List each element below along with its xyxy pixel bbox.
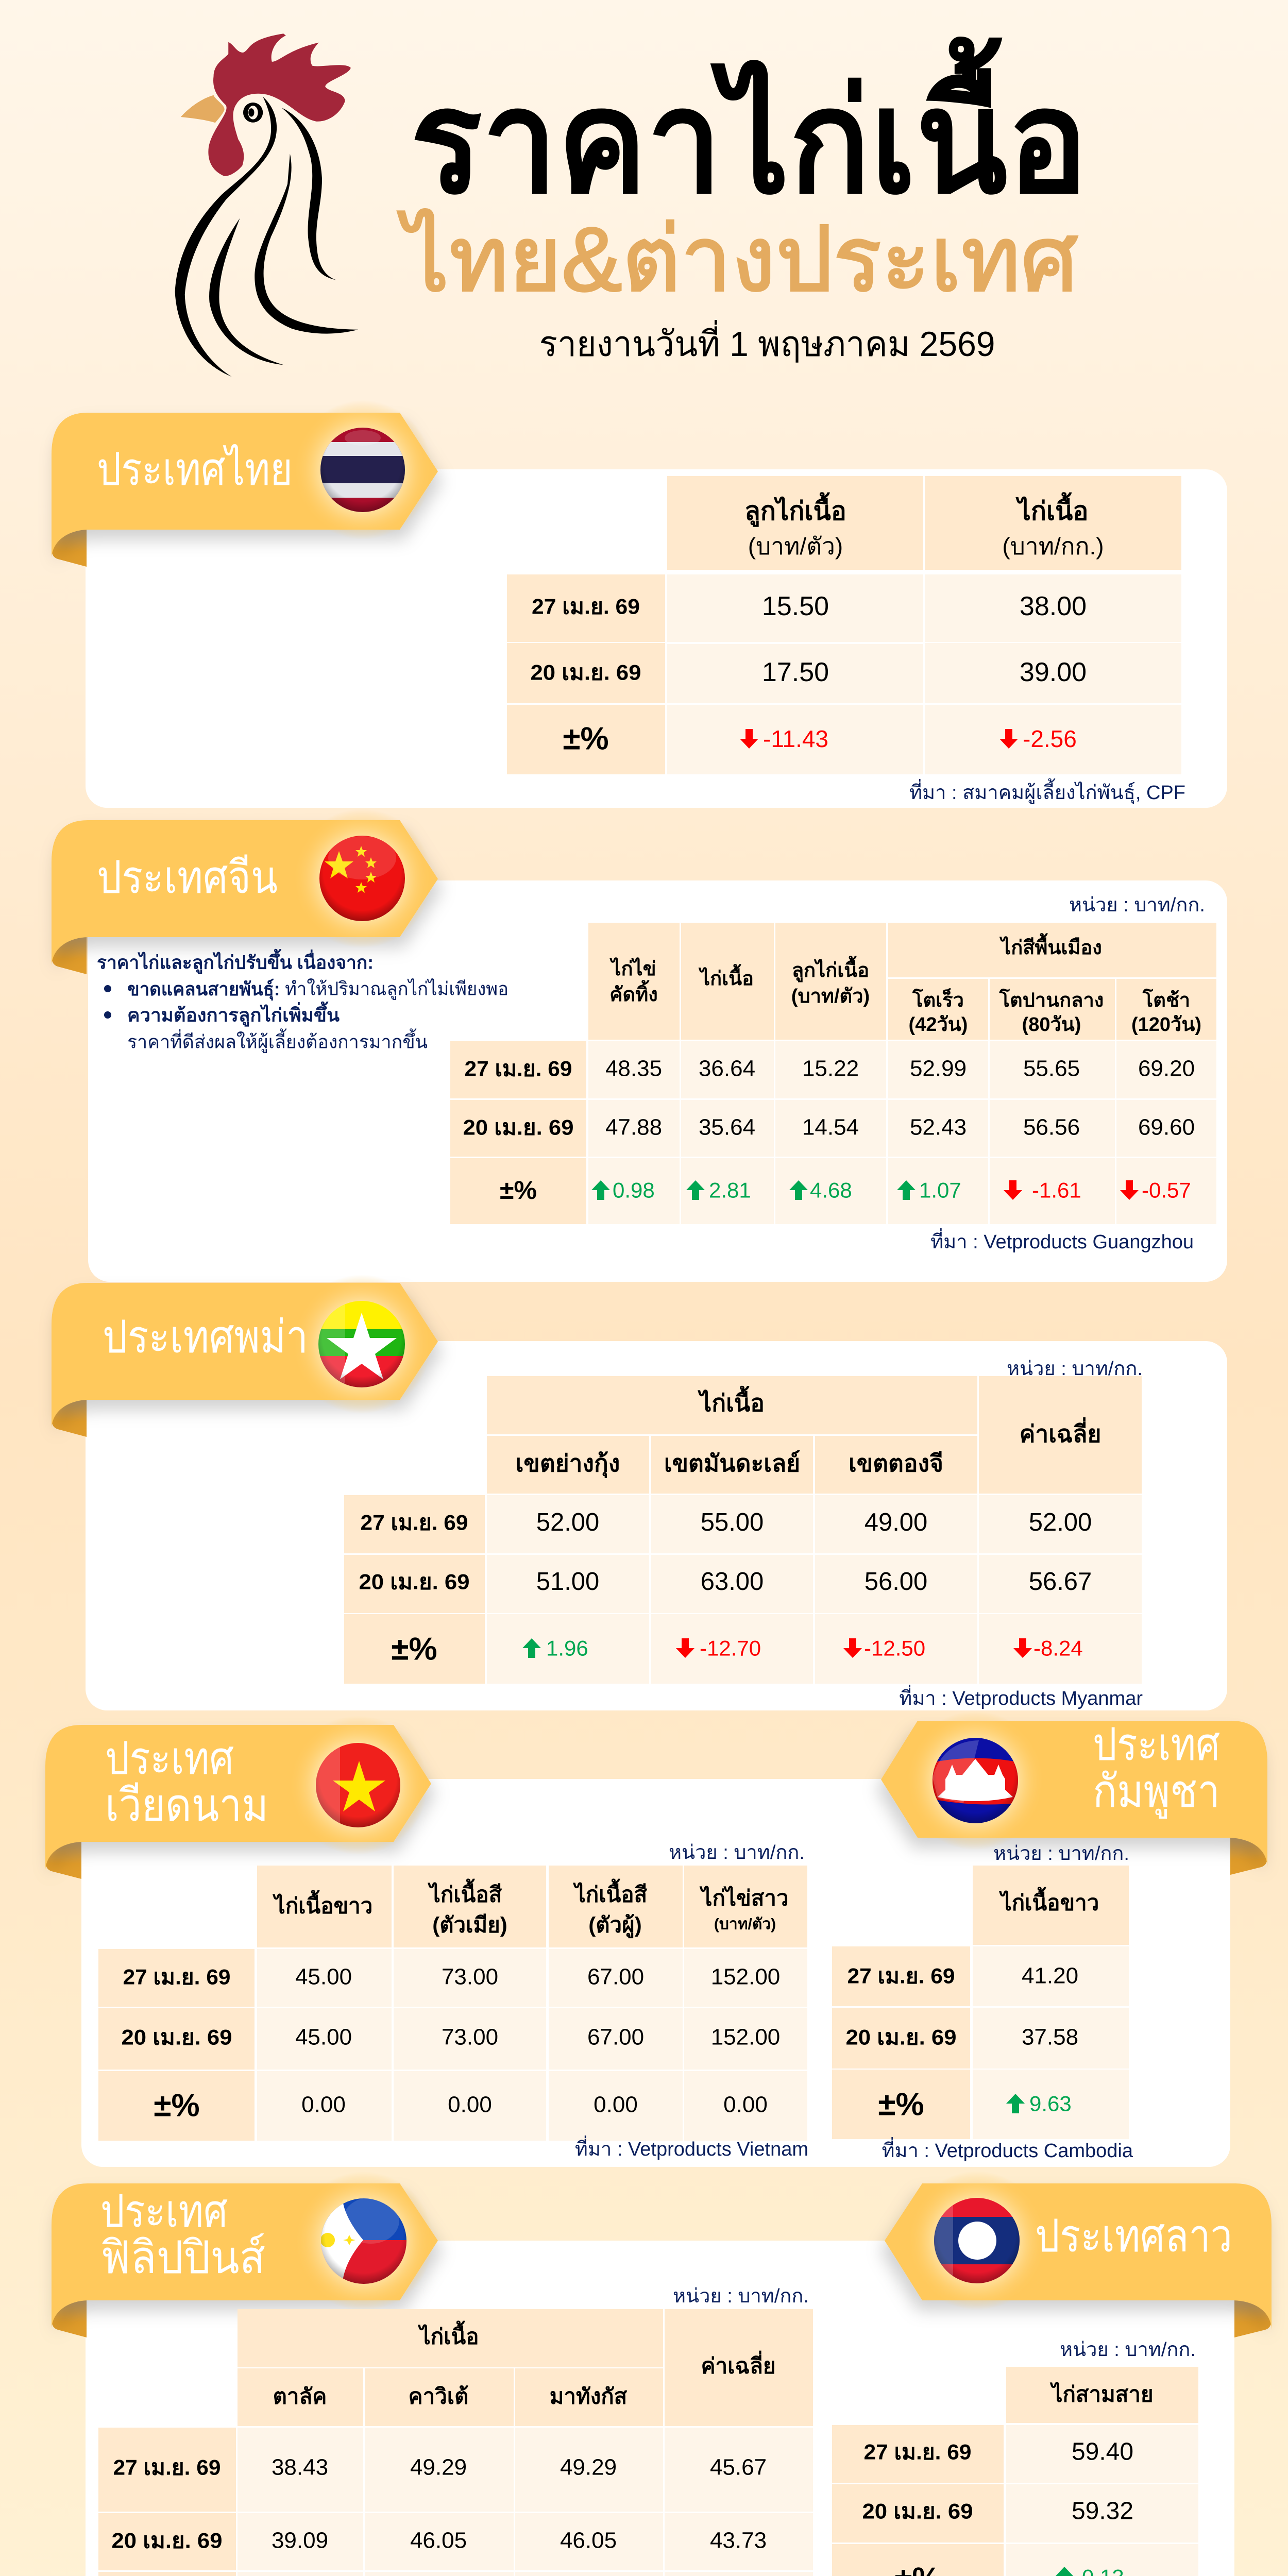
table: 35.64 bbox=[699, 1115, 755, 1140]
table: Vietnam: 73.00 bbox=[442, 2025, 498, 2049]
table: -12.50 bbox=[864, 1636, 925, 1660]
table: 27 เม.ย. 69 bbox=[361, 1511, 468, 1534]
table: Vietnam: ไก่เนื้อสี bbox=[428, 1878, 502, 1906]
flag: China bbox=[303, 811, 428, 946]
country name: Cambodia: กัมพูชา bbox=[1093, 1766, 1220, 1819]
table: 63.00 bbox=[701, 1568, 764, 1596]
table: Vietnam: ไก่ไข่สาว bbox=[699, 1886, 789, 1910]
table: Vietnam: 0.00 bbox=[301, 2092, 346, 2117]
country name: ประเทศพม่า bbox=[103, 1311, 308, 1362]
country name: Philippines: ประเทศ bbox=[100, 2185, 228, 2236]
subtitle: ไทย&ต่างประเทศ bbox=[398, 209, 1078, 310]
table: Laos bbox=[832, 2367, 1198, 2576]
panel card bbox=[86, 2241, 1234, 2576]
table: 2.81 bbox=[709, 1178, 751, 1202]
table: Vietnam: ไก่เนื้อสี bbox=[573, 1878, 648, 1906]
table: Philippines: 46.05 bbox=[560, 2528, 617, 2553]
table: Philippines: 38.43 bbox=[272, 2454, 328, 2480]
table: Philippines bbox=[98, 2309, 813, 2576]
rooster comb bbox=[208, 33, 351, 176]
rooster feathers bbox=[175, 97, 358, 377]
ribbon bbox=[52, 820, 438, 974]
table: 17.50 bbox=[762, 657, 829, 687]
rooster beak bbox=[181, 95, 225, 123]
table: 20 เม.ย. 69 bbox=[463, 1115, 574, 1140]
table: Cambodia: ไก่เนื้อขาว bbox=[999, 1887, 1099, 1914]
table: 47.88 bbox=[605, 1115, 662, 1140]
table: (42วัน) bbox=[909, 1014, 968, 1036]
panel: Thailand bbox=[52, 400, 1227, 808]
table: 56.00 bbox=[865, 1568, 927, 1596]
table: Cambodia: ±% bbox=[878, 2087, 924, 2123]
note: reasons: ความต้องการลูกไก่เพิ่มขึ้น bbox=[127, 1002, 340, 1027]
table: Cambodia: 41.20 bbox=[1022, 1963, 1078, 1989]
table: Laos: 27 เม.ย. 69 bbox=[863, 2440, 972, 2464]
table: 52.43 bbox=[910, 1115, 967, 1140]
panel: Philippines and Laos bbox=[52, 2171, 1272, 2576]
table: Vietnam: 152.00 bbox=[711, 1964, 780, 1990]
table: 49.00 bbox=[865, 1509, 927, 1536]
table: (บาท/ตัว) bbox=[791, 986, 870, 1007]
ribbon: Laos bbox=[885, 2183, 1272, 2337]
table: -1.61 bbox=[1032, 1178, 1081, 1202]
table: -11.43 bbox=[763, 725, 828, 752]
ribbon: Philippines bbox=[52, 2183, 438, 2337]
table: Vietnam: (บาท/ตัว) bbox=[714, 1916, 776, 1933]
table: Cambodia: 9.63 bbox=[1029, 2092, 1072, 2115]
table: Cambodia: 20 เม.ย. 69 bbox=[846, 2025, 956, 2049]
table: ±% bbox=[500, 1176, 537, 1205]
country name: Philippines bbox=[100, 2185, 265, 2283]
panel: Vietnam and Cambodia bbox=[45, 1711, 1267, 2167]
panel card bbox=[86, 1341, 1227, 1710]
table bbox=[507, 476, 1181, 774]
title: ราคาไก่เนื้อ bbox=[410, 36, 1088, 223]
panel card bbox=[81, 1779, 1230, 2167]
table: 15.22 bbox=[802, 1056, 859, 1081]
table: Vietnam: 67.00 bbox=[587, 1964, 644, 1990]
unit: Vietnam: หน่วย : บาท/กก. bbox=[669, 1842, 805, 1863]
country name: Vietnam bbox=[105, 1733, 268, 1831]
note: reasons bbox=[97, 949, 509, 1053]
table: 20 เม.ย. 69 bbox=[359, 1569, 470, 1594]
table: 36.64 bbox=[699, 1056, 755, 1081]
country name: ประเทศจีน bbox=[97, 852, 278, 903]
table: Philippines: 45.67 bbox=[710, 2454, 767, 2480]
table: 56.67 bbox=[1029, 1568, 1092, 1596]
table bbox=[344, 1376, 1142, 1684]
table: 52.00 bbox=[536, 1509, 599, 1536]
table: ไก่เนื้อ bbox=[697, 1385, 765, 1416]
table: ไก่เนื้อ bbox=[1015, 492, 1088, 526]
table: 48.35 bbox=[605, 1056, 662, 1081]
table: ลูกไก่เนื้อ bbox=[792, 956, 869, 982]
table: (บาท/ตัว) bbox=[748, 533, 843, 560]
table: (120วัน) bbox=[1131, 1014, 1201, 1036]
table: Vietnam: ไก่เนื้อขาว bbox=[273, 1890, 372, 1918]
table: โตเร็ว bbox=[912, 988, 964, 1011]
table: -2.56 bbox=[1023, 725, 1077, 752]
ribbon bbox=[52, 1283, 438, 1437]
note: reasons: ราคาที่ดีส่งผลให้ผู้เลี้ยงต้องการมากขึ้น bbox=[127, 1028, 428, 1053]
table: Vietnam: 45.00 bbox=[295, 2025, 352, 2049]
country name: ประเทศไทย bbox=[97, 444, 293, 495]
table: Philippines: 27 เม.ย. 69 bbox=[113, 2455, 221, 2479]
table: -8.24 bbox=[1033, 1636, 1083, 1660]
table: 4.68 bbox=[810, 1178, 852, 1202]
ribbon: Vietnam bbox=[45, 1725, 431, 1879]
table: ไก่ไข่ bbox=[609, 957, 656, 980]
table: 27 เม.ย. 69 bbox=[465, 1056, 572, 1081]
table: 69.60 bbox=[1138, 1115, 1195, 1140]
table: Philippines: 20 เม.ย. 69 bbox=[111, 2529, 223, 2552]
table: Vietnam: 0.00 bbox=[448, 2092, 492, 2117]
flag: Cambodia bbox=[916, 1714, 1035, 1849]
table: -12.70 bbox=[700, 1636, 761, 1660]
table: Cambodia: 37.58 bbox=[1022, 2025, 1078, 2049]
panel card bbox=[88, 880, 1227, 1282]
table: 1.07 bbox=[919, 1178, 961, 1202]
table: โตปานกลาง bbox=[999, 988, 1104, 1011]
table: 51.00 bbox=[536, 1568, 599, 1596]
report date: รายงานวันที่ 1 พฤษภาคม 2569 bbox=[539, 320, 995, 364]
table: 55.65 bbox=[1023, 1056, 1080, 1081]
table bbox=[450, 923, 1216, 1224]
table: 56.56 bbox=[1023, 1115, 1080, 1140]
table: 52.99 bbox=[910, 1056, 967, 1081]
table: โตช้า bbox=[1142, 988, 1190, 1011]
table: Laos: 20 เม.ย. 69 bbox=[862, 2499, 973, 2523]
table: Philippines: 39.09 bbox=[272, 2528, 328, 2553]
table: Philippines: ตาลัค bbox=[273, 2384, 327, 2408]
table: เขตย่างกุ้ง bbox=[516, 1450, 620, 1478]
table: Philippines: 49.29 bbox=[410, 2454, 467, 2480]
panel: Myanmar bbox=[52, 1275, 1227, 1710]
table: Vietnam: 0.00 bbox=[723, 2092, 768, 2117]
table: (80วัน) bbox=[1022, 1014, 1081, 1036]
table: (บาท/กก.) bbox=[1002, 533, 1104, 560]
table: 69.20 bbox=[1138, 1056, 1195, 1081]
table: ไก่เนื้อ bbox=[698, 964, 754, 990]
table: คัดทิ้ง bbox=[609, 980, 658, 1006]
table: Philippines: มาทังกัส bbox=[550, 2384, 628, 2408]
table: ±% bbox=[391, 1631, 437, 1667]
country name: Vietnam: เวียดนาม bbox=[105, 1780, 268, 1831]
unit: Laos: หน่วย : บาท/กก. bbox=[1060, 2339, 1196, 2361]
table: Laos: 59.40 bbox=[1072, 2438, 1133, 2466]
country name: Philippines: ฟิลิปปินส์ bbox=[100, 2232, 265, 2283]
table: ไก่สีพื้นเมือง bbox=[999, 933, 1102, 959]
table: Philippines: 49.29 bbox=[560, 2454, 617, 2480]
table: Vietnam: 67.00 bbox=[587, 2025, 644, 2049]
panel: China bbox=[52, 809, 1227, 1282]
table: -0.57 bbox=[1142, 1178, 1191, 1202]
ribbon bbox=[52, 413, 438, 567]
table: 55.00 bbox=[701, 1509, 764, 1536]
table: ±% bbox=[563, 721, 609, 756]
unit: หน่วย : บาท/กก. bbox=[1007, 1358, 1143, 1380]
table: Vietnam: 0.00 bbox=[594, 2092, 638, 2117]
table: เขตมันดะเลย์ bbox=[664, 1450, 800, 1477]
table: 20 เม.ย. 69 bbox=[531, 660, 641, 684]
note: reasons: ราคาไก่และลูกไก่ปรับขึ้น เนื่องจาก: bbox=[97, 949, 374, 975]
table: 0.98 bbox=[613, 1178, 655, 1202]
table: 15.50 bbox=[762, 591, 829, 621]
table: Vietnam bbox=[98, 1866, 807, 2141]
note: reasons: ขาดแคลนสายพันธุ์: ทำให้ปริมาณลูกไก่ไม่เพียงพอ bbox=[127, 978, 509, 1001]
table: 1.96 bbox=[546, 1636, 588, 1660]
table: Philippines: 46.05 bbox=[410, 2528, 467, 2553]
table: 38.00 bbox=[1020, 591, 1087, 621]
panel card bbox=[86, 469, 1227, 808]
table: 52.00 bbox=[1029, 1509, 1092, 1536]
table: Vietnam: 73.00 bbox=[442, 1964, 498, 1990]
table: 14.54 bbox=[802, 1115, 859, 1140]
flag: Laos bbox=[907, 2171, 1046, 2310]
table: Vietnam: 20 เม.ย. 69 bbox=[122, 2025, 232, 2049]
country name: Vietnam: ประเทศ bbox=[105, 1733, 234, 1784]
table: ลูกไก่เนื้อ bbox=[744, 492, 846, 527]
table: เขตตองจี bbox=[849, 1450, 943, 1477]
flag: Myanmar bbox=[303, 1276, 428, 1412]
source: ที่มา : สมาคมผู้เลี้ยงไก่พันธุ์, CPF bbox=[909, 778, 1185, 804]
table: Vietnam: (ตัวเมีย) bbox=[432, 1912, 507, 1937]
source: Vietnam: ที่มา : Vetproducts Vietnam bbox=[575, 2136, 808, 2160]
table: Vietnam: (ตัวผู้) bbox=[588, 1912, 642, 1938]
table: Laos: 59.32 bbox=[1072, 2498, 1133, 2524]
flag: Thailand bbox=[303, 402, 429, 537]
source: Cambodia: ที่มา : Vetproducts Cambodia bbox=[882, 2137, 1133, 2162]
source: ที่มา : Vetproducts Myanmar bbox=[899, 1685, 1143, 1709]
unit: Philippines: หน่วย : บาท/กก. bbox=[673, 2285, 809, 2307]
country name: Laos: ประเทศลาว bbox=[1035, 2210, 1232, 2261]
table: Cambodia: 27 เม.ย. 69 bbox=[847, 1964, 955, 1988]
table: Philippines: คาวิเต้ bbox=[409, 2384, 468, 2408]
country name: Cambodia: ประเทศ bbox=[1093, 1719, 1220, 1770]
table: Vietnam: 27 เม.ย. 69 bbox=[123, 1965, 231, 1989]
table: Philippines: ไก่เนื้อ bbox=[418, 2320, 479, 2348]
ribbon: Cambodia bbox=[881, 1721, 1267, 1875]
table: Cambodia bbox=[832, 1866, 1129, 2139]
table: Philippines: ค่าเฉลี่ย bbox=[701, 2350, 776, 2378]
country name: Cambodia bbox=[1093, 1719, 1220, 1819]
unit: หน่วย : บาท/กก. bbox=[1069, 894, 1205, 916]
table: Vietnam: 45.00 bbox=[295, 1964, 352, 1990]
flag: Vietnam bbox=[299, 1718, 425, 1853]
table: Vietnam: 152.00 bbox=[711, 2025, 780, 2049]
table: Philippines: 43.73 bbox=[710, 2528, 767, 2553]
logo: rooster bbox=[175, 33, 358, 377]
table: 39.00 bbox=[1020, 657, 1087, 687]
unit: Cambodia: หน่วย : บาท/กก. bbox=[993, 1843, 1129, 1865]
flag: Philippines bbox=[304, 2174, 430, 2309]
table: ค่าเฉลี่ย bbox=[1020, 1417, 1101, 1447]
table: Vietnam: ±% bbox=[154, 2088, 200, 2124]
source: ที่มา : Vetproducts Guangzhou bbox=[930, 1228, 1194, 1253]
table: 27 เม.ย. 69 bbox=[532, 595, 640, 618]
table: Laos: ไก่สามสาย bbox=[1049, 2381, 1154, 2406]
